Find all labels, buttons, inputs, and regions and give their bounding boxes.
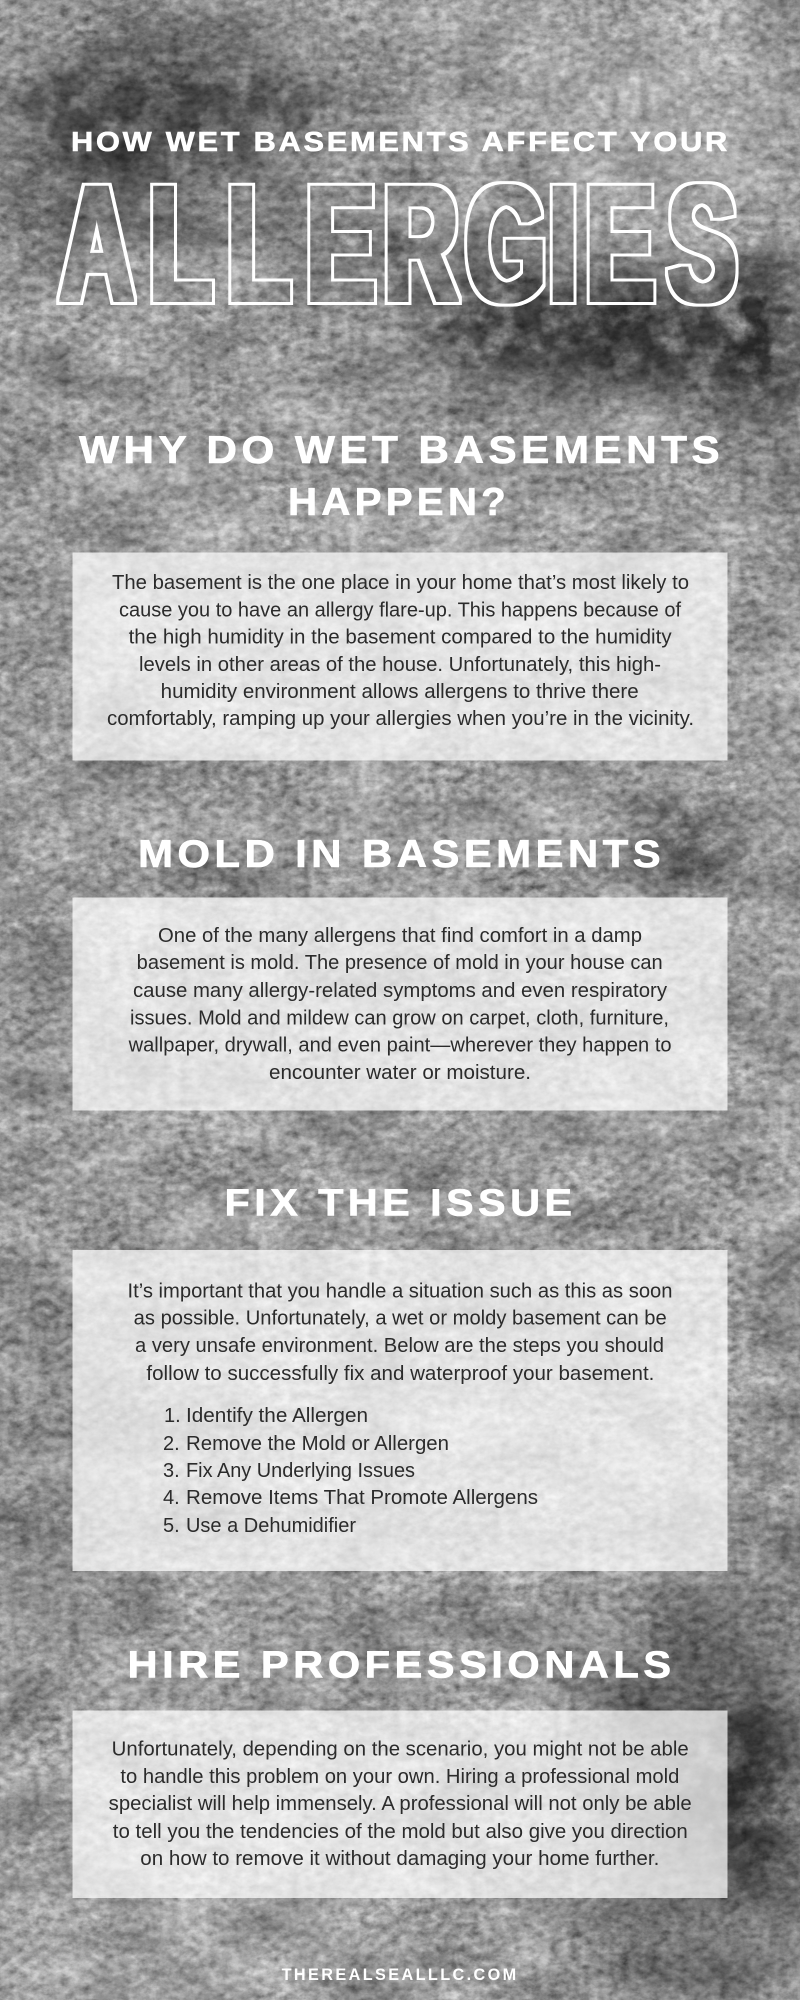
panel [72,552,728,760]
body text: One of the many allergens that find comfort in a damp [158,925,642,947]
body text: the high humidity in the basement compared to the humidity [129,627,672,649]
body text: basement is mold. The presence of mold in your house can [137,952,663,974]
numbered list of steps: Remove the Mold or Allergen [186,1433,449,1455]
numbered list of steps: 5. [163,1515,180,1537]
body text [128,1280,672,1385]
body text: to handle this problem on your own. Hiring a professional mold [120,1766,679,1788]
body text [109,1738,692,1870]
body text [128,925,672,1084]
numbered list of steps: Identify the Allergen [186,1405,368,1427]
body text: on how to remove it without damaging your home further. [140,1848,659,1870]
panel [72,1710,728,1898]
body text: humidity environment allows allergens to thrive there [161,681,639,703]
body text: cause many allergy-related symptoms and even respiratory [133,980,667,1002]
body text: Unfortunately, depending on the scenario, you might not be able [112,1738,689,1760]
body text: encounter water or moisture. [269,1062,531,1084]
body text: levels in other areas of the house. Unfortunately, this high- [139,654,661,676]
body text: comfortably, ramping up your allergies when you’re in the vicinity. [107,708,694,730]
body text [107,572,694,730]
heading: MOLD IN BASEMENTS [138,833,665,876]
heading: HAPPEN? [288,481,510,524]
section: hire professionals [72,1644,728,1898]
numbered list of steps: Fix Any Underlying Issues [186,1460,415,1482]
numbered list of steps: Use a Dehumidifier [186,1515,356,1537]
numbered list of steps: 4. [163,1487,180,1509]
body text: a very unsafe environment. Below are the steps you should [135,1335,664,1357]
numbered list of steps: 2. [163,1433,180,1455]
numbered list of steps: Remove Items That Promote Allergens [186,1487,538,1509]
title line: how wet basements affect your: HOW WET BASEMENTS AFFECT YOUR [71,126,730,157]
numbered list of steps: 3. [163,1460,180,1482]
section: mold in basements [72,833,728,1110]
body text: to tell you the tendencies of the mold but also give you direction [113,1821,688,1843]
panel [72,898,728,1110]
section: why do wet basements happen [72,429,728,760]
section: fix the issue [72,1182,728,1571]
panel [72,1250,728,1571]
body text: cause you to have an allergy flare-up. This happens because of [119,599,681,621]
footer: website address: THEREALSEALLLC.COM [282,1965,519,1984]
heading [79,429,724,524]
heading: HIRE PROFESSIONALS [128,1644,676,1686]
body text: as possible. Unfortunately, a wet or moldy basement can be [134,1308,667,1330]
body text: It’s important that you handle a situation such as this as soon [128,1280,672,1302]
body text: issues. Mold and mildew can grow on carpet, cloth, furniture, [130,1008,669,1030]
body text: wallpaper, drywall, and even paint—wherever they happen to [128,1034,672,1056]
heading: WHY DO WET BASEMENTS [79,429,724,472]
body text: follow to successfully fix and waterproof your basement. [146,1363,654,1385]
numbered list of steps [163,1405,538,1537]
numbered list of steps: 1. [164,1405,181,1427]
body text: specialist will help immensely. A professional will not only be able [109,1793,692,1815]
outlined title word: allergies: ALLERGIES [60,152,737,337]
title block [60,126,737,337]
body text: The basement is the one place in your home that’s most likely to [112,572,689,594]
heading: FIX THE ISSUE [224,1182,576,1224]
